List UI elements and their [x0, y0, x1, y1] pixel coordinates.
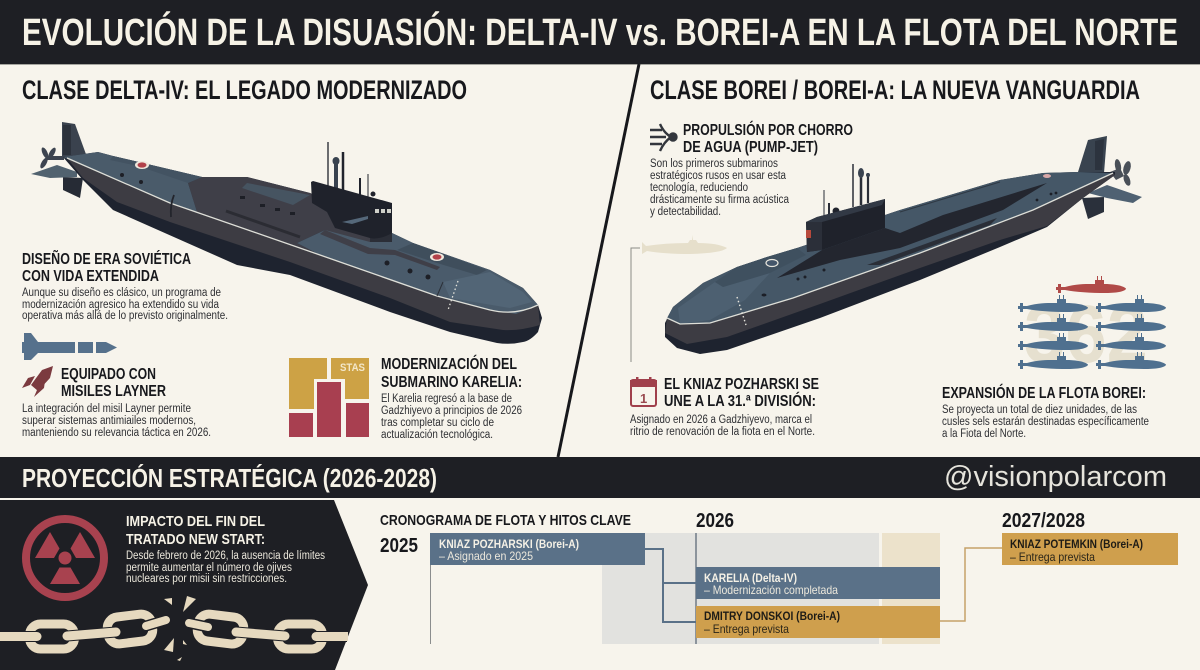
text block: pump-jet: drásticamente su firma acústica	[650, 194, 790, 206]
bar: Kniaz Potemkin: KNIAZ POTEMKIN (Borei-A)	[1010, 537, 1143, 551]
text block: pump-jet: DE AGUA (PUMP-JET)	[683, 139, 818, 156]
text block: New START: TRATADO NEW START:	[126, 531, 265, 548]
fleet pictogram: 362	[1024, 289, 1148, 380]
text block: misiles Layner: La integración del misil Layner permite	[22, 403, 191, 415]
text block: Karelia: actualización tecnológica.	[381, 429, 493, 441]
text block: New START: Desde febrero de 2026, la ausencia de límites	[126, 550, 325, 562]
panel: cronograma	[380, 510, 1178, 644]
text block: diseño soviético: Aunque su diseño es clásico, un programa de	[22, 287, 221, 299]
text block: diseño soviético	[22, 248, 228, 322]
bar: Kniaz Potemkin: – Entrega prevista	[1010, 550, 1095, 564]
text block: diseño soviético: modernización agresico ha extendido su vida	[22, 299, 220, 311]
bar: Karelia: KARELIA (Delta-IV)	[704, 571, 797, 585]
text block: expansión flota: cusles sels estarán destinadas específicamente	[942, 416, 1149, 428]
year 2027/2028: 2027/2028	[1002, 510, 1085, 532]
text block: diseño soviético: DISEÑO DE ERA SOVIÉTICA	[22, 248, 191, 268]
text block: Kniaz Pozharski: EL KNIAZ POZHARSKI SE	[664, 376, 819, 393]
bar: Kniaz Pozharski: KNIAZ POZHARSKI (Borei-A)	[439, 537, 579, 551]
icon: stats blocks	[289, 358, 369, 437]
heading: Delta-IV: CLASE DELTA-IV: EL LEGADO MODERNIZADO	[22, 75, 467, 105]
title banner	[0, 0, 1200, 65]
text block: pump-jet: y detectabilidad.	[650, 206, 721, 218]
text block: expansión flota: Se proyecta un total de diez unidades, de las	[942, 404, 1137, 416]
icon: radiation	[26, 519, 104, 597]
text block: diseño soviético: operativa más allá de lo previsto originalmente.	[22, 310, 228, 322]
text block: misiles Layner: EQUIPADO CON	[61, 366, 156, 383]
text block: Karelia: SUBMARINO KARELIA:	[381, 374, 522, 391]
bar: Dmitry Donskoi: – Entrega prevista	[704, 622, 789, 636]
submarine: Borei-A	[665, 136, 1142, 354]
icon: missile	[22, 333, 117, 360]
band: proyección estratégica	[0, 457, 1200, 498]
panel: Delta-IV	[22, 75, 542, 441]
panel: Borei	[630, 75, 1166, 440]
icon: broken chain	[0, 596, 348, 661]
text block: expansión flota	[942, 383, 1149, 440]
text block: Karelia: El Karelia regresó a la base de	[381, 393, 512, 405]
year 2025: 2025	[380, 535, 418, 557]
text block: misiles Layner: manteniendo su relevancia táctica en 2026.	[22, 427, 211, 439]
small beige submarine with leader line	[631, 235, 727, 362]
text block: New START: IMPACTO DEL FIN DEL	[126, 513, 265, 530]
icon: calendar	[630, 377, 657, 406]
text block: New START	[126, 513, 325, 585]
text block: pump-jet: PROPULSIÓN POR CHORRO	[683, 120, 853, 139]
text block: expansión flota: EXPANSIÓN DE LA FLOTA BOREI:	[942, 383, 1146, 402]
text block: Kniaz Pozharski	[630, 376, 819, 438]
text block: New START: nucleares por misii sin restricciones.	[126, 573, 287, 585]
bar: Kniaz Pozharski: – Asignado en 2025	[439, 549, 533, 563]
bar: Dmitry Donskoi: DMITRY DONSKOI (Borei-A)	[704, 609, 840, 623]
bar: Karelia	[696, 567, 940, 599]
text block: pump-jet: tecnología, reduciendo	[650, 182, 748, 194]
text block: pump-jet: estratégicos rusos en usar esta	[650, 170, 787, 182]
timeline heading: CRONOGRAMA DE FLOTA Y HITOS CLAVE	[380, 512, 631, 529]
band: proyección estratégica: PROYECCIÓN ESTRATÉGICA (2026-2028)	[22, 463, 437, 493]
bar: Dmitry Donskoi	[696, 606, 940, 638]
text block: Karelia	[381, 354, 522, 441]
text block: New START: permite aumentar el número de ojives	[126, 562, 292, 574]
text block: Kniaz Pozharski: Asignado en 2026 a Gadzhiyevo, marca el	[630, 414, 812, 426]
panel: New START	[0, 500, 368, 670]
text block: misiles Layner: superar sistemas antimiailes modernos,	[22, 415, 196, 427]
icon: rocket	[22, 366, 53, 397]
bar: Kniaz Pozharski	[430, 533, 645, 565]
text block: diseño soviético: CON VIDA EXTENDIDA	[22, 268, 159, 285]
text block: misiles Layner	[22, 366, 211, 439]
text block: Karelia: tras completar su ciclo de	[381, 417, 494, 429]
text block: Kniaz Pozharski: UNE A LA 31.ª DIVISIÓN:	[664, 391, 816, 410]
text block: misiles Layner: MISILES LAYNER	[61, 383, 166, 400]
text block: expansión flota: a la Fiota del Norte.	[942, 428, 1026, 440]
icon: pump-jet	[650, 124, 676, 151]
text block: pump-jet	[650, 120, 853, 218]
text block: pump-jet: Son los primeros submarinos	[650, 158, 778, 170]
bar: Kniaz Potemkin	[1002, 533, 1178, 565]
submarine: Delta-IV	[31, 122, 542, 344]
connectors	[645, 548, 1002, 622]
text block: Karelia: MODERNIZACIÓN DEL	[381, 354, 517, 373]
text block: Karelia: Gadzhiyevo a principios de 2026	[381, 405, 522, 417]
bar: Karelia: – Modernización completada	[704, 583, 838, 597]
icon: calendar: 1	[640, 391, 647, 406]
icon: stats blocks: STAS	[340, 362, 365, 374]
year 2026: 2026	[696, 510, 734, 532]
band: proyección estratégica: @visionpolarcom	[944, 461, 1167, 493]
text block: Kniaz Pozharski: ritrio de renovación de la fiota en el Norte.	[630, 426, 815, 438]
